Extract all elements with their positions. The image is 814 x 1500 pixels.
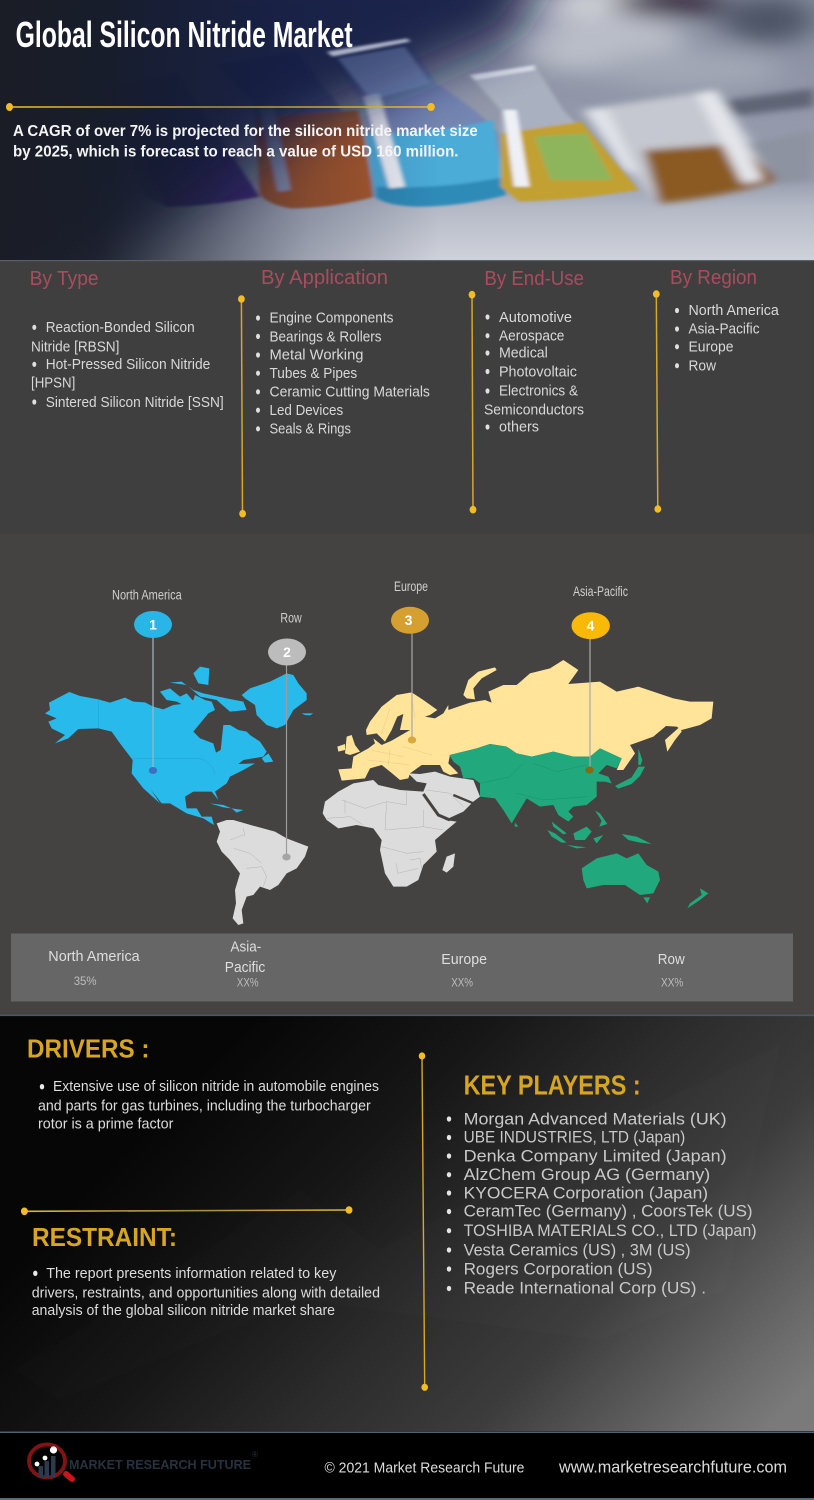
text block: key players: KEY PLAYERS : xyxy=(464,1069,641,1100)
pin: europe xyxy=(391,578,429,744)
text block: key players: TOSHIBA MATERIALS CO., LTD (Japan) xyxy=(464,1221,757,1240)
segment: by application: Tubes & Pipes xyxy=(270,365,357,382)
pin: europe: 3 xyxy=(405,612,413,628)
panel: market segments xyxy=(0,260,814,534)
panel: regional share bar xyxy=(11,934,793,1002)
text block: key players: Denka Company Limited (Japan) xyxy=(464,1146,727,1165)
pin: asia-pacific: Asia-Pacific xyxy=(573,583,628,599)
text block: restraint: analysis of the global silicon nitride market share xyxy=(32,1302,335,1319)
pin: north america: North America xyxy=(112,586,182,602)
copyright: © 2021 Market Research Future xyxy=(324,1460,524,1477)
share: row: XX% xyxy=(661,976,684,990)
text block: key players: CeramTec (Germany) , CoorsTek (US) xyxy=(464,1202,753,1221)
pin: row xyxy=(268,610,306,860)
text block: restraint xyxy=(32,1222,380,1319)
segment: by type: Reaction-Bonded Silicon xyxy=(46,319,195,336)
logo wordmark xyxy=(69,1450,258,1472)
region: north america xyxy=(45,667,313,825)
segment: by type: Nitride [RBSN] xyxy=(31,338,119,355)
segment: by region: Asia-Pacific xyxy=(688,321,760,338)
segment: by end-use xyxy=(484,268,584,436)
hero summary text xyxy=(13,123,478,161)
share: north america xyxy=(48,948,140,988)
divider: type and application xyxy=(238,295,246,518)
map: eurasia, africa, oceania xyxy=(323,660,713,908)
divider: application and end-use xyxy=(469,291,476,514)
divider: vertical xyxy=(419,1052,428,1391)
segment: by region: By Region xyxy=(670,267,757,289)
text block: drivers xyxy=(27,1034,379,1132)
segment: by application: Ceramic Cutting Materials xyxy=(270,384,430,401)
region: south america xyxy=(217,820,308,925)
text block: key players: UBE INDUSTRIES, LTD (Japan) xyxy=(464,1128,685,1147)
share: europe: XX% xyxy=(451,976,473,990)
segment: by type: Sintered Silicon Nitride [SSN] xyxy=(46,394,224,411)
region: africa and middle east xyxy=(323,772,480,887)
divider: drivers and restraint xyxy=(21,1206,353,1215)
text block: restraint: The report presents information related to key xyxy=(46,1265,337,1282)
segment: by end-use: Medical xyxy=(499,345,548,362)
panel: regional map xyxy=(0,534,814,1016)
region: asia-pacific xyxy=(449,744,708,908)
logo wordmark: ® xyxy=(252,1450,258,1459)
segment: by region xyxy=(670,267,779,375)
pin: row: 2 xyxy=(283,644,291,660)
segment: by type: Hot-Pressed Silicon Nitride xyxy=(46,356,210,373)
text block: key players xyxy=(447,1069,757,1298)
share: europe: Europe xyxy=(441,951,487,968)
panel: drivers, restraint, key players xyxy=(0,1014,814,1431)
region: europe and russia xyxy=(337,660,713,781)
panel: footer xyxy=(0,1431,814,1500)
map: americas xyxy=(45,667,313,925)
segment: by end-use: By End-Use xyxy=(484,268,584,290)
segment: by application: Led Devices xyxy=(270,402,343,419)
segment: by type: [HPSN] xyxy=(31,375,75,392)
icon: company logo xyxy=(29,1444,72,1479)
pin: row: Row xyxy=(280,610,302,626)
segment: by end-use: others xyxy=(499,419,539,436)
text block: key players: Morgan Advanced Materials (UK) xyxy=(464,1109,727,1128)
share: north america: North America xyxy=(48,948,140,965)
share: europe xyxy=(441,951,487,990)
share: asia-pacific: Asia- xyxy=(230,939,261,956)
share: asia-pacific: XX% xyxy=(237,976,259,990)
pin: asia-pacific xyxy=(572,583,628,774)
text block: drivers: DRIVERS : xyxy=(27,1034,150,1064)
text block: drivers: and parts for gas turbines, including the turbocharger xyxy=(38,1097,371,1114)
segment: by region: Row xyxy=(688,358,716,375)
panel: hero banner xyxy=(0,0,814,260)
segment: by application: Metal Working xyxy=(270,347,364,364)
pin: north america: 1 xyxy=(149,616,157,632)
divider: end-use and region xyxy=(653,290,661,513)
title: Global Silicon Nitride Market xyxy=(16,14,353,55)
website: www.marketresearchfuture.com xyxy=(558,1459,787,1477)
segment: by region: North America xyxy=(688,302,779,319)
text block: key players: Rogers Corporation (US) xyxy=(464,1259,653,1278)
hero summary text: A CAGR of over 7% is projected for the silicon nitride market size xyxy=(13,123,478,140)
text block: restraint: RESTRAINT: xyxy=(32,1222,177,1252)
segment: by application: By Application xyxy=(261,267,388,289)
share: asia-pacific xyxy=(225,939,266,990)
segment: by end-use: Automotive xyxy=(499,309,572,326)
segment: by application xyxy=(256,267,430,438)
share: row: Row xyxy=(658,951,685,968)
text block: key players: AlzChem Group AG (Germany) xyxy=(464,1165,710,1184)
text block: drivers: rotor is a prime factor xyxy=(38,1115,173,1132)
pin: north america xyxy=(112,586,182,774)
share: row xyxy=(658,951,685,990)
share: asia-pacific: Pacific xyxy=(225,959,266,976)
pin: europe: Europe xyxy=(394,578,428,594)
segment: by type xyxy=(30,268,224,411)
text block: key players: KYOCERA Corporation (Japan) xyxy=(464,1183,708,1202)
segment: by end-use: Semiconductors xyxy=(484,401,584,418)
text block: key players: Vesta Ceramics (US) , 3M (US) xyxy=(464,1241,691,1260)
text block: key players: Reade International Corp (US) . xyxy=(464,1279,706,1298)
segment: by end-use: Photovoltaic xyxy=(499,363,577,380)
segment: by end-use: Electronics & xyxy=(499,383,578,400)
segment: by application: Seals & Rings xyxy=(270,421,351,438)
text block: restraint: drivers, restraints, and opportunities along with detailed xyxy=(32,1284,380,1301)
segment: by type: By Type xyxy=(30,268,99,290)
segment: by end-use: Aerospace xyxy=(499,327,564,344)
hero divider with end dots xyxy=(6,103,435,111)
hero summary text: by 2025, which is forecast to reach a value of USD 160 million. xyxy=(13,144,458,161)
text block: drivers: Extensive use of silicon nitride in automobile engines xyxy=(53,1078,379,1095)
logo wordmark: MARKET RESEARCH FUTURE xyxy=(69,1457,251,1472)
segment: by application: Engine Components xyxy=(270,310,394,327)
segment: by region: Europe xyxy=(688,338,734,355)
pin: asia-pacific: 4 xyxy=(587,618,595,634)
share: north america: 35% xyxy=(74,974,97,988)
segment: by application: Bearings & Rollers xyxy=(270,328,382,345)
